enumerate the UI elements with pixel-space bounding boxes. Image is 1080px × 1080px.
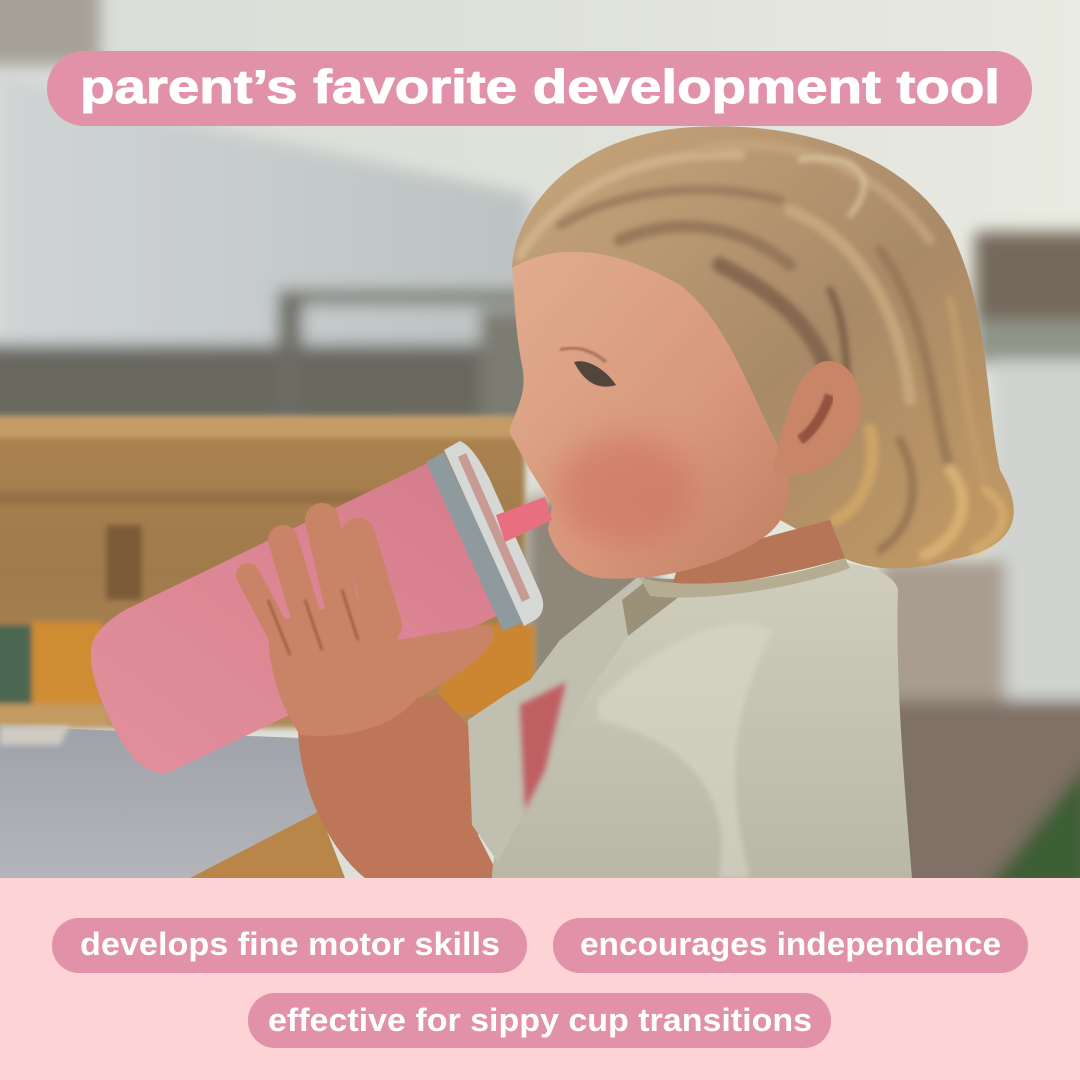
arm (298, 695, 500, 878)
cup body (91, 462, 505, 773)
metal rim (426, 452, 524, 631)
clear lid (444, 441, 543, 626)
shirt (468, 562, 912, 878)
pill: develops fine motor skills: develops fine motor skills (80, 926, 500, 962)
pill: encourages independence: encourages independence (580, 926, 1001, 962)
little finger (248, 575, 285, 645)
wooden fence (0, 416, 535, 728)
pill: develops fine motor skills (52, 918, 527, 973)
bottom panel (0, 878, 1080, 1080)
table top (0, 726, 345, 878)
pill: effective for sippy cup transitions: effective for sippy cup transitions (268, 1002, 812, 1038)
hand on cup (248, 520, 494, 736)
face (509, 252, 789, 579)
hair back (512, 126, 1014, 568)
straw (496, 497, 552, 542)
pill: encourages independence (553, 918, 1028, 973)
pill: effective for sippy cup transitions (248, 993, 831, 1048)
middle finger (322, 520, 345, 620)
ring finger (283, 540, 310, 630)
eye (574, 361, 616, 387)
collar (640, 558, 850, 598)
title text: parent’s favorite development tool (80, 60, 1000, 113)
sippy cup (91, 441, 552, 773)
title banner (47, 51, 1032, 126)
index finger (358, 535, 385, 625)
neck (670, 520, 845, 592)
ear (772, 361, 861, 474)
